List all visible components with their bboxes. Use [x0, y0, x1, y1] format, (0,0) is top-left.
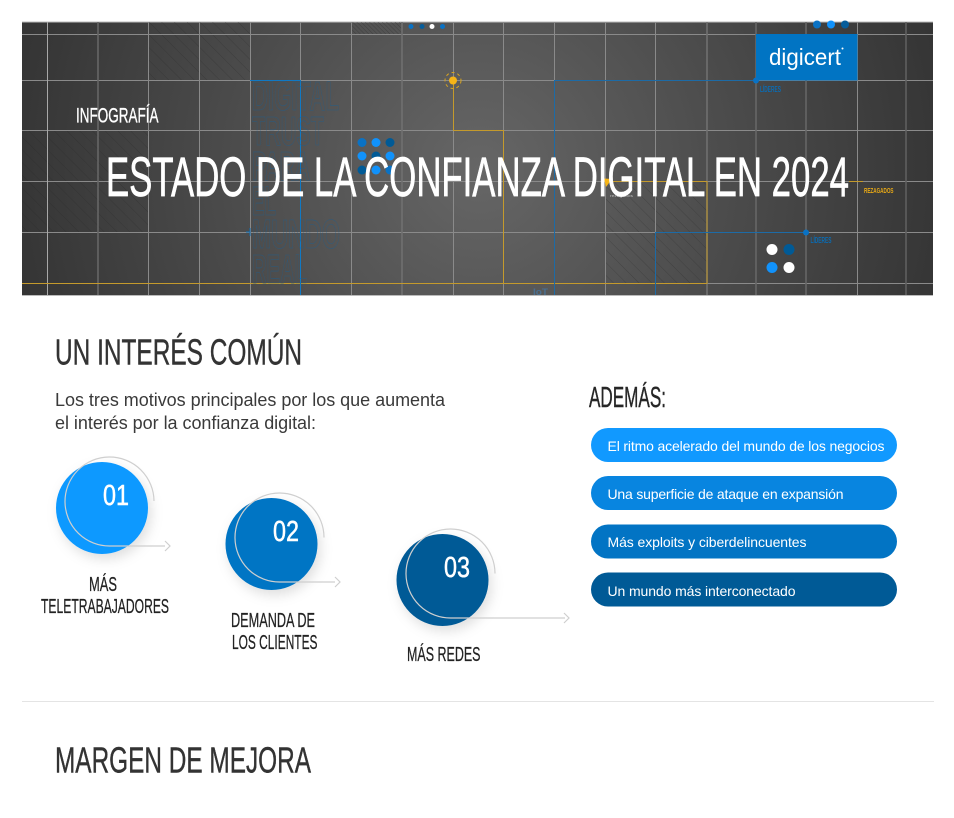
pill 1: El ritmo acelerado del mundo de los negocios	[608, 438, 884, 454]
item 01	[41, 457, 170, 618]
label: infografía: INFOGRAFÍA	[76, 104, 158, 128]
item 03: MÁS REDES	[407, 643, 480, 666]
item 01: MÁS	[89, 573, 117, 596]
label: iot: IoT	[533, 287, 549, 297]
ghost text: digital trust: TRUST	[252, 108, 324, 154]
text block: intro: Los tres motivos principales por los que aumenta	[55, 390, 446, 410]
chart lines: blue	[246, 80, 806, 295]
item 02	[226, 493, 340, 654]
icon: leader node top	[753, 78, 759, 84]
icon: gold target	[445, 72, 461, 88]
panel: header banner	[22, 20, 933, 297]
heading: un interés común: UN INTERÉS COMÚN	[55, 332, 302, 372]
text block: intro	[55, 390, 446, 433]
ghost text: digital trust	[252, 73, 340, 292]
pill 4: Un mundo más interconectado	[608, 583, 796, 599]
label: small marker caption: rezagados	[610, 193, 633, 198]
icon: top dots	[408, 24, 445, 29]
icon: logo top dots	[813, 20, 849, 28]
ghost text: digital trust: PARA	[252, 143, 310, 189]
item 01: 01	[103, 480, 129, 512]
ghost text: digital trust: EL	[252, 178, 276, 224]
label: líderes bottom: LÍDERES	[810, 236, 832, 245]
label: rezagados: REZAGADOS	[864, 186, 894, 195]
pill 2: Una superficie de ataque en expansión	[608, 486, 844, 502]
item 02: LOS CLIENTES	[232, 632, 318, 654]
pill 2	[591, 476, 897, 510]
ghost text: digital trust: DIGITAL	[252, 73, 339, 119]
ghost text: digital trust: MUNDO	[252, 211, 340, 257]
chart lines: gold	[22, 80, 863, 284]
icon: leader node bottom	[803, 230, 809, 236]
pill 3: Más exploits y ciberdelincuentes	[608, 534, 806, 550]
pill 1	[591, 428, 897, 462]
item 03	[396, 529, 569, 666]
logo: digicert	[756, 34, 858, 80]
item 02: 02	[273, 516, 299, 548]
ghost text: digital trust: REAL	[252, 246, 307, 292]
logo: digicert: digicert	[769, 44, 842, 70]
label: líderes top: LÍDERES	[760, 85, 781, 94]
heading: margen de mejora: MARGEN DE MEJORA	[55, 740, 311, 780]
pill 4	[591, 572, 897, 606]
icon: center dots	[358, 138, 394, 174]
item 01: TELETRABAJADORES	[41, 596, 169, 618]
item 02: DEMANDA DE	[231, 610, 315, 632]
pill 3	[591, 524, 897, 558]
text block: intro: el interés por la confianza digital:	[55, 413, 316, 433]
icon: gold marker	[604, 178, 612, 187]
heading: además: ADEMÁS:	[589, 381, 666, 414]
icon: bottom-right dots	[766, 244, 794, 273]
item 03: 03	[444, 552, 470, 584]
